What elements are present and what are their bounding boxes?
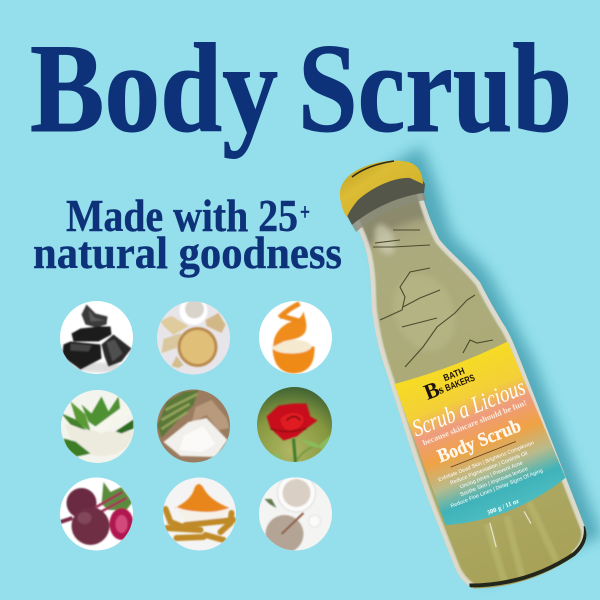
gold cap — [340, 161, 423, 217]
bottle shadow — [326, 136, 600, 583]
label divider — [451, 442, 516, 467]
brand logo: BAKERS — [444, 373, 477, 394]
title: Body — [30, 19, 278, 159]
subtitle: Made with 25 — [66, 190, 298, 241]
label panel — [391, 338, 569, 534]
net weight: 300 g / 11 oz — [486, 498, 520, 517]
benefits list: Reduce Pigmentation | Controls Oil — [449, 451, 528, 487]
ingredient: neem in mortar — [60, 390, 134, 464]
benefits list: Reduce Fine Lines | Delay Signs Of Aging — [450, 468, 544, 510]
label — [391, 338, 569, 534]
subtitle: + — [300, 200, 310, 226]
ingredient: turmeric — [162, 477, 236, 551]
powder cracks — [373, 230, 493, 367]
ingredient: multani clay — [156, 297, 230, 375]
ingredient: orange peel — [258, 300, 332, 374]
benefits list: Exfoliate Dead Skin | Brightens Complexion — [438, 440, 535, 483]
subtitle — [33, 190, 342, 278]
ingredient: beetroot — [60, 477, 134, 551]
ingredient: charcoal — [60, 300, 134, 374]
subtitle: natural goodness — [33, 227, 342, 278]
brand logo: BATH — [442, 366, 467, 384]
product bottle — [340, 160, 586, 588]
powder fill — [355, 193, 586, 588]
benefits list: Unclog pores | Prevent Acne — [459, 460, 524, 490]
product name script: Scrub a Licious — [409, 374, 529, 442]
ingredient: rice — [156, 389, 230, 463]
brand logo: B — [420, 376, 443, 405]
label heading: Body Scrub — [434, 416, 524, 467]
brand logo — [420, 362, 478, 405]
bottom rim — [469, 526, 586, 588]
title — [30, 19, 572, 159]
benefits list: Soothe Skin | Improves texture — [459, 466, 529, 498]
ingredient: scrub paste — [258, 474, 332, 553]
bottle body — [355, 193, 586, 588]
ingredient: red rose — [256, 386, 332, 462]
ingredient grid — [60, 297, 332, 553]
brand logo: s — [436, 382, 446, 397]
neck ring — [345, 170, 426, 232]
tagline: because skincare should be fun! — [421, 398, 528, 447]
benefits list — [438, 440, 546, 510]
